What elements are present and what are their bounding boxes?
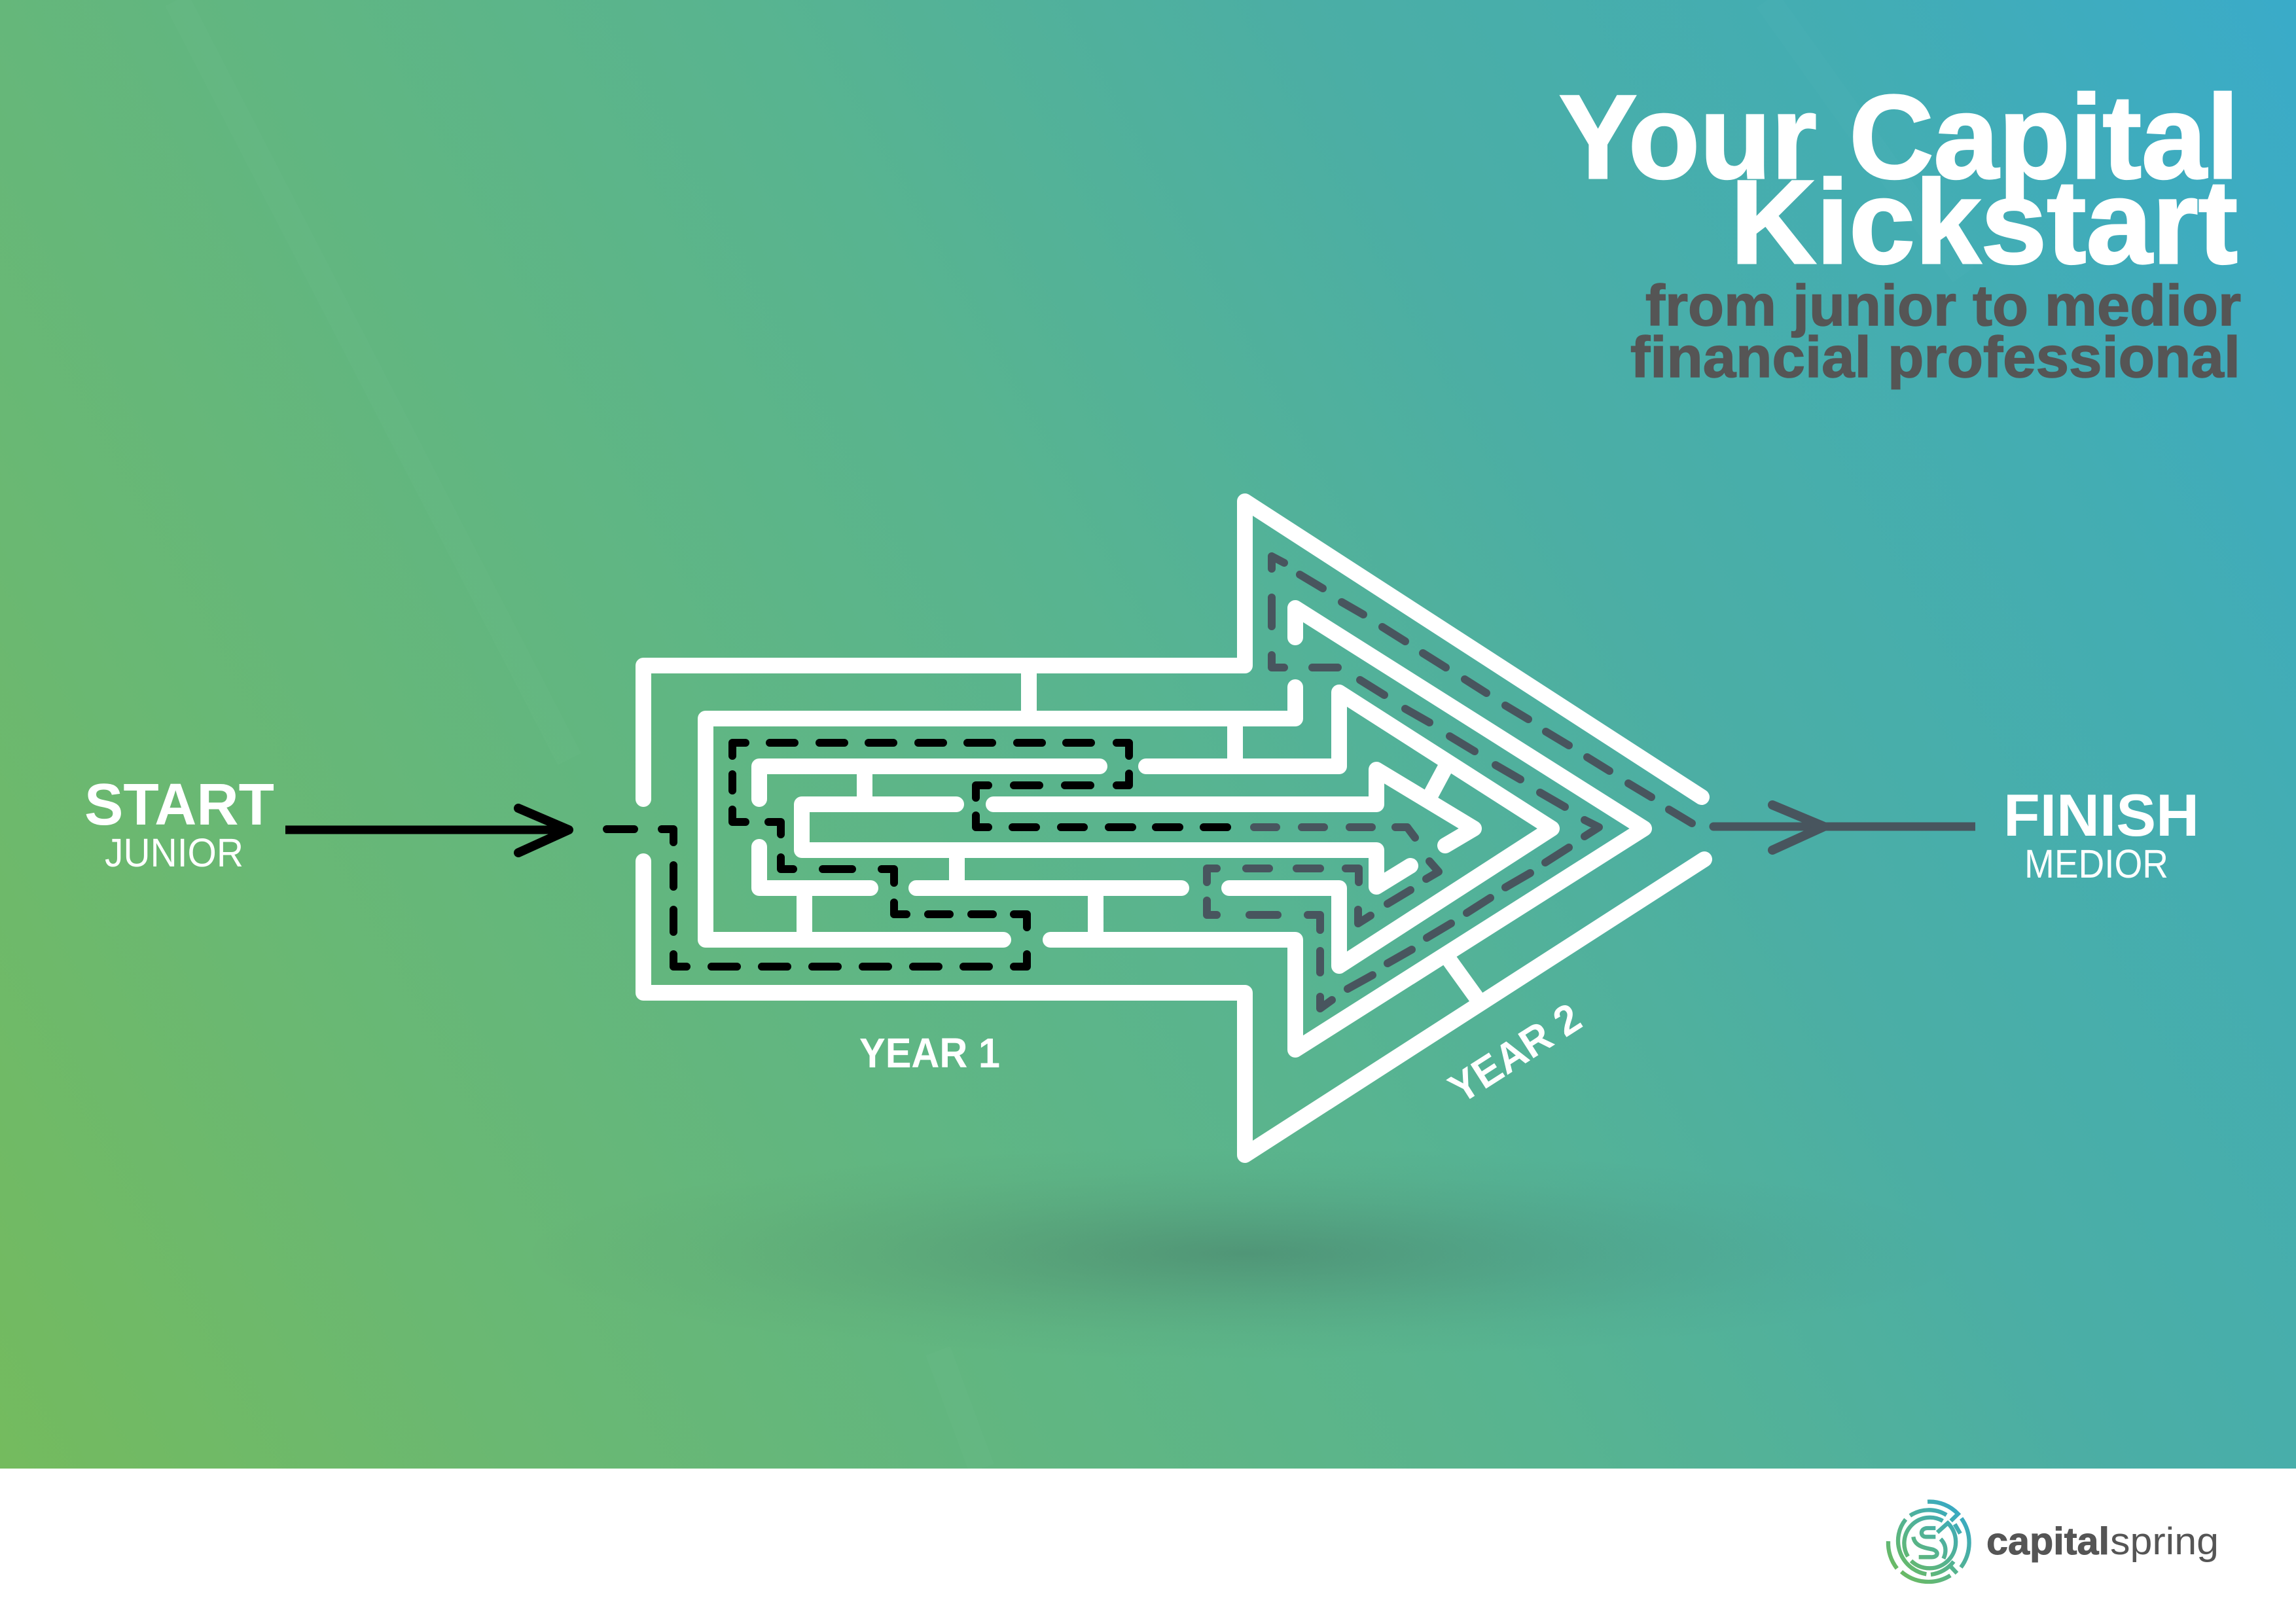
- start arrow: [285, 808, 569, 853]
- year 2 label: YEAR 2: [1441, 993, 1589, 1113]
- maze arrow walls: [643, 501, 1704, 1155]
- finish label: [2003, 783, 2199, 886]
- subtitle: financial professional: [1630, 325, 2240, 389]
- finish label: MEDIOR: [2024, 842, 2168, 886]
- subtitle: [1630, 273, 2241, 389]
- capitalspring wordmark: spring: [2110, 1520, 2219, 1563]
- capitalspring wordmark: [1986, 1520, 2219, 1563]
- title: Kickstart: [1731, 155, 2238, 289]
- dashed route: year 1: [607, 743, 1227, 967]
- start label: START: [84, 772, 274, 838]
- finish label: FINISH: [2003, 783, 2199, 849]
- start label: [84, 772, 274, 875]
- subtitle: from junior to medior: [1645, 273, 2241, 338]
- second wall: [706, 608, 1644, 1050]
- connecting ticks: [804, 666, 1480, 1003]
- third wall: [759, 692, 1552, 966]
- title: Your Capital: [1559, 70, 2239, 204]
- dashed route: year 2: [1207, 556, 1692, 1008]
- arrow ground shadow: [512, 1145, 1979, 1361]
- outer wall: [643, 501, 1704, 1155]
- year 1 label: YEAR 1: [859, 1029, 1000, 1077]
- start label: JUNIOR: [105, 830, 243, 875]
- white footer band: [0, 1469, 2296, 1623]
- title: [1559, 70, 2239, 289]
- capitalspring logo icon: [1888, 1502, 1969, 1582]
- inner arrow wall: [802, 770, 1474, 887]
- capitalspring wordmark: capital: [1986, 1520, 2109, 1563]
- finish arrow: [1713, 805, 1975, 850]
